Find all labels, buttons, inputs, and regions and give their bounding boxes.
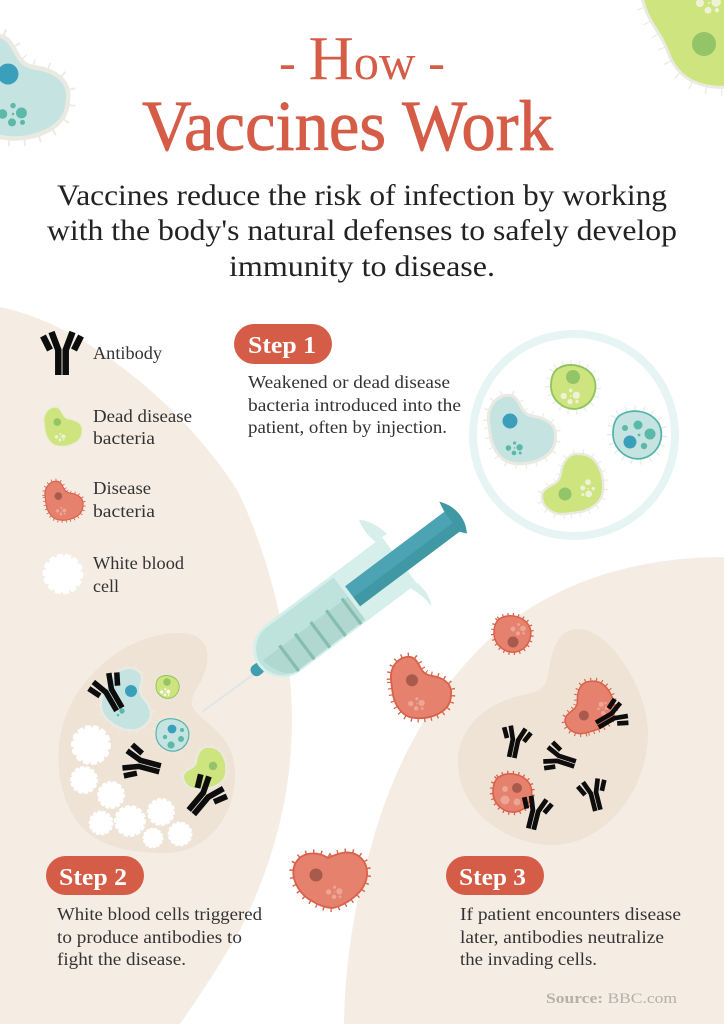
step 2 badge: Step 2 xyxy=(59,865,127,891)
tick marks xyxy=(279,599,361,671)
legend label: white blood cell: White blood xyxy=(93,553,184,573)
teal round bacterium xyxy=(613,411,661,459)
barrel xyxy=(241,537,417,689)
antibody xyxy=(517,794,553,832)
legend label: dead disease bacteria: Dead disease xyxy=(93,406,192,426)
intro text: immunity to disease. xyxy=(229,250,495,283)
antibody xyxy=(121,744,164,784)
legend label: white blood cell xyxy=(93,553,184,596)
green kidney bacterium xyxy=(542,454,603,514)
red round bacterium bottom xyxy=(493,774,532,812)
source: Source: BBC.com xyxy=(546,991,677,1007)
teal round bacterium xyxy=(156,719,189,751)
step 2 text: to produce antibodies to xyxy=(57,927,242,947)
legend label: dead disease bacteria xyxy=(93,406,192,448)
antibody xyxy=(577,777,611,814)
red heart-shaped bacterium xyxy=(293,852,367,908)
step 3 text xyxy=(460,904,681,969)
cyan bacterium with antibody xyxy=(89,661,169,741)
legend label: disease bacteria xyxy=(93,478,155,521)
legend label: disease bacteria: Disease xyxy=(93,478,151,498)
liquid xyxy=(245,577,365,686)
step 2 xyxy=(46,856,262,969)
step 1 text xyxy=(248,372,461,437)
step 2 text: fight the disease. xyxy=(57,949,186,969)
intro text: Vaccines reduce the risk of infection by working xyxy=(57,179,667,212)
antibody xyxy=(541,741,579,777)
antibody xyxy=(498,724,532,760)
background shape: left xyxy=(0,307,292,1024)
icon: antibody xyxy=(43,332,81,375)
green kidney bacterium xyxy=(183,747,226,789)
antibody xyxy=(178,772,229,823)
blob background xyxy=(58,633,235,853)
step 3 illustration xyxy=(391,616,648,845)
legend label: disease bacteria: bacteria xyxy=(93,501,155,521)
plunger xyxy=(338,497,471,611)
step 1 text: Weakened or dead disease xyxy=(248,372,450,392)
step 2 text xyxy=(57,904,262,969)
step 2 text: White blood cells triggered xyxy=(57,904,262,924)
blob background xyxy=(458,629,648,845)
green round bacterium xyxy=(551,365,595,409)
step 1 text: patient, often by injection. xyxy=(248,417,447,437)
flange xyxy=(357,511,438,611)
bacteria: top left cyan xyxy=(0,36,68,138)
step 3 text: the invading cells. xyxy=(460,949,597,969)
step 3 badge: Step 3 xyxy=(459,865,526,891)
green round bacterium xyxy=(156,676,179,698)
white blood cells xyxy=(71,727,191,847)
legend label: dead disease bacteria: bacteria xyxy=(93,428,155,448)
title: - How - xyxy=(279,25,445,93)
legend xyxy=(43,332,192,596)
title: Vaccines Work xyxy=(142,86,553,166)
hub xyxy=(248,660,267,678)
liquid shade xyxy=(263,597,365,683)
intro text xyxy=(47,179,677,283)
red bacterium with antibody xyxy=(559,678,618,736)
red round bacterium top xyxy=(494,616,531,652)
icon: white blood cell xyxy=(45,556,81,592)
step 2 badge xyxy=(46,856,144,895)
step 3 badge xyxy=(446,856,544,895)
step 3 text: If patient encounters disease xyxy=(460,904,681,924)
step 3 xyxy=(446,856,681,969)
step 1 badge: Step 1 xyxy=(248,333,316,359)
step 1 text: bacteria introduced into the xyxy=(248,395,461,415)
legend label: white blood cell: cell xyxy=(93,576,119,596)
red bacterium outside left xyxy=(391,657,451,718)
step 1 badge xyxy=(234,324,332,364)
intro text: with the body's natural defenses to safely develop xyxy=(47,214,677,247)
step 3 text: later, antibodies neutralize xyxy=(460,927,664,947)
legend label: antibody: Antibody xyxy=(93,343,162,363)
antibody xyxy=(590,698,631,737)
icon: disease bacteria xyxy=(45,481,83,520)
background shape: right xyxy=(344,557,724,1024)
step 2 illustration xyxy=(58,633,235,853)
cyan bacterium xyxy=(488,395,556,464)
bacteria: top right green xyxy=(641,0,724,87)
step 1 xyxy=(234,324,461,437)
icon: dead disease bacteria xyxy=(44,407,82,446)
antibody xyxy=(87,669,133,717)
syringe xyxy=(202,469,494,717)
needle xyxy=(202,674,254,712)
petri dish with bacteria xyxy=(473,334,675,536)
title xyxy=(142,25,553,166)
